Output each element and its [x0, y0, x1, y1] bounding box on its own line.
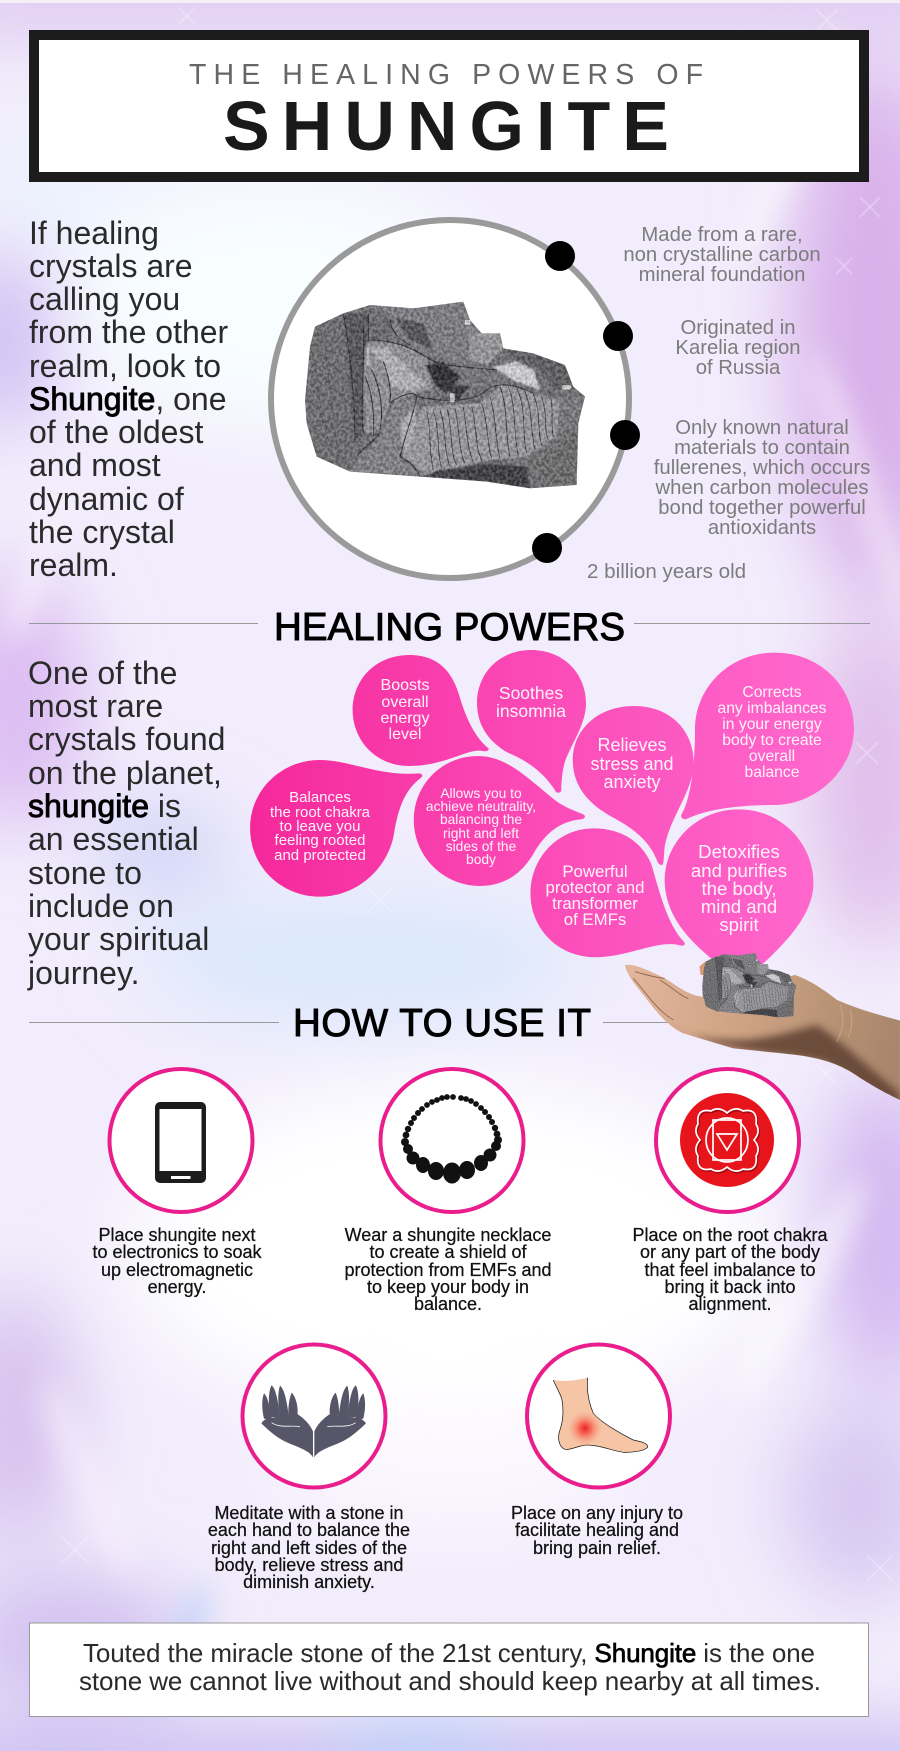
fact: fullerenes: antioxidants [708, 517, 816, 539]
use: phone [110, 1069, 252, 1212]
fact: origin: Karelia region [675, 337, 801, 359]
icon: phone [155, 1102, 206, 1183]
bubble: allows neutrality: body [466, 852, 496, 867]
bubble: boosts energy [381, 677, 429, 743]
intro text: realm, look to [29, 348, 221, 384]
icon: open hands [261, 1385, 366, 1457]
bubble: allows neutrality: balancing the [440, 812, 522, 827]
caption: injury [511, 1503, 683, 1558]
caption: meditate: diminish anxiety. [243, 1572, 375, 1592]
fact: fullerenes: bond together powerful [658, 497, 866, 519]
shungite rock [300, 297, 590, 493]
caption: root chakra [632, 1225, 829, 1314]
caption: meditate: Meditate with a stone in [214, 1503, 404, 1523]
intro text: and most [29, 447, 161, 483]
bubble: corrects imbalances: body to create [722, 732, 822, 749]
closing statement box: Touted the miracle stone of the 21st century, Shungite is the one [83, 1638, 815, 1668]
text: rare crystal: crystals found [28, 721, 225, 757]
use: injury [527, 1344, 670, 1488]
title main: SHUNGITE [223, 87, 669, 165]
bubble: EMF protector: protector and [546, 878, 644, 897]
caption: meditate [208, 1503, 410, 1592]
caption: meditate: each hand to balance the [208, 1520, 410, 1540]
bubble: detoxifies [691, 841, 787, 935]
caption: phone [92, 1225, 263, 1297]
caption: phone: to electronics to soak [92, 1242, 263, 1262]
fact: rare mineral: non crystalline carbon [623, 244, 821, 266]
fact dots [532, 241, 640, 563]
caption: root chakra: that feel imbalance to [644, 1260, 816, 1280]
bubble: balances root chakra: the root chakra [270, 804, 371, 821]
bubble: balances root chakra: Balances [289, 789, 351, 806]
closing statement box: stone we cannot live without and should keep nearby at all times. [79, 1666, 821, 1696]
caption: injury: bring pain relief. [533, 1538, 661, 1558]
speech bubbles [250, 650, 854, 967]
bubble: EMF protector: transformer [552, 894, 638, 913]
caption: necklace [344, 1225, 552, 1314]
fact: fullerenes: when carbon molecules [654, 477, 869, 499]
intro text: from the other [29, 314, 229, 350]
text: rare crystal [27, 655, 225, 991]
icon: necklace [401, 1094, 502, 1184]
bubble: balances root chakra: to leave you [280, 818, 360, 835]
use: necklace [380, 1069, 524, 1212]
hand holding shungite [620, 951, 900, 1107]
bubble: detoxifies: spirit [719, 914, 759, 935]
fact: fullerenes: Only known natural [675, 417, 849, 439]
fact: fullerenes [654, 417, 870, 539]
line beside how to use it heading [29, 1022, 670, 1024]
caption: necklace: protection from EMFs and [344, 1260, 552, 1280]
text: rare crystal: most rare [28, 688, 163, 724]
fact: fullerenes: fullerenes, which occurs [654, 457, 870, 479]
caption: injury: facilitate healing and [515, 1520, 679, 1540]
bubble: detoxifies: mind and [701, 896, 777, 917]
text: rare crystal: on the planet, [28, 755, 222, 791]
caption: meditate: body, relieve stress and [215, 1555, 403, 1575]
intro text: calling you [29, 281, 180, 317]
bubble: relieves stress: anxiety [603, 772, 661, 792]
caption: root chakra: alignment. [688, 1294, 772, 1314]
caption: necklace: balance. [414, 1294, 482, 1314]
intro text: of the oldest [29, 414, 203, 450]
intro text: If healing [29, 215, 159, 251]
text: rare crystal: include on [28, 888, 174, 924]
bubble: detoxifies: and purifies [691, 860, 787, 881]
title banner [34, 35, 864, 177]
bubble: boosts energy: energy [381, 710, 429, 727]
bubble: allows neutrality: sides of the [446, 839, 517, 854]
fact: fullerenes: materials to contain [674, 437, 850, 459]
bubble: relieves stress: stress and [590, 754, 674, 774]
caption: phone: energy. [148, 1277, 206, 1297]
bubble: balances root chakra [270, 789, 371, 864]
title kicker: THE HEALING POWERS OF [189, 59, 703, 91]
bubble: EMF protector: Powerful [562, 862, 628, 881]
bubble: corrects imbalances: any imbalances [717, 700, 827, 717]
text: rare crystal: an essential [28, 821, 199, 857]
closing statement box [30, 1623, 868, 1716]
bubble: allows neutrality: Allows you to [440, 786, 522, 801]
bubble: corrects imbalances: in your energy [722, 716, 822, 733]
bubble: boosts energy: level [389, 726, 421, 743]
intro text [29, 215, 229, 583]
bubble: EMF protector: of EMFs [564, 910, 626, 929]
bubble: boosts energy: overall [381, 694, 429, 711]
icon: foot with pain point [553, 1378, 648, 1452]
bubble: soothes insomnia: Soothes [499, 683, 563, 703]
bubble: relieves stress [590, 735, 674, 792]
fact: age: 2 billion years old [587, 560, 746, 583]
circle with shungite rock and fact dots [271, 220, 640, 578]
caption: phone: Place shungite next [98, 1225, 256, 1245]
caption: necklace: to create a shield of [369, 1242, 528, 1262]
intro text: Shungite, one [29, 381, 226, 417]
bubble: corrects imbalances: Corrects [742, 684, 802, 701]
fact: rare mineral: mineral foundation [639, 264, 805, 286]
bubble: corrects imbalances [717, 684, 827, 781]
caption: injury: Place on any injury to [511, 1503, 683, 1523]
text: rare crystal: stone to [28, 855, 142, 891]
heading: how to use it: HOW TO USE IT [293, 1002, 591, 1045]
fact: origin: Originated in [680, 317, 796, 339]
bubble: allows neutrality: achieve neutrality, [426, 799, 536, 814]
bubble: detoxifies: Detoxifies [698, 841, 780, 862]
use: meditate [242, 1344, 386, 1488]
intro text: the crystal [29, 514, 175, 550]
bubble: relieves stress: Relieves [597, 735, 667, 755]
bubble: soothes insomnia: insomnia [496, 701, 566, 721]
caption: phone: up electromagnetic [101, 1260, 253, 1280]
bubble: EMF protector [546, 862, 644, 929]
bubble: detoxifies: the body, [701, 878, 777, 899]
text: rare crystal: One of the [28, 655, 177, 691]
caption: root chakra: or any part of the body [640, 1242, 820, 1262]
intro text: realm. [29, 547, 118, 583]
fact: origin [675, 317, 801, 379]
caption: root chakra: bring it back into [664, 1277, 796, 1297]
bubble: allows neutrality: right and left [443, 826, 519, 841]
bubble: corrects imbalances: balance [745, 764, 800, 781]
caption: necklace: to keep your body in [367, 1277, 529, 1297]
intro text: dynamic of [29, 481, 184, 517]
small shungite rock [700, 951, 798, 1019]
caption: meditate: right and left sides of the [211, 1538, 407, 1558]
fact: rare mineral [623, 224, 821, 286]
caption: root chakra: Place on the root chakra [632, 1225, 829, 1245]
intro text: crystals are [29, 248, 193, 284]
bubble: balances root chakra: feeling rooted [275, 832, 365, 849]
use: root chakra [656, 1069, 799, 1212]
bubble: boosts energy: Boosts [381, 677, 429, 694]
fact: origin: of Russia [696, 357, 781, 379]
bubble: balances root chakra: and protected [274, 847, 366, 864]
heading: healing powers: HEALING POWERS [274, 606, 625, 649]
icon: root chakra [680, 1093, 774, 1187]
fact: rare mineral: Made from a rare, [641, 224, 803, 246]
text: rare crystal: your spiritual [28, 921, 209, 957]
text: rare crystal: shungite is [28, 788, 181, 824]
bubble: allows neutrality [426, 786, 536, 867]
caption: necklace: Wear a shungite necklace [345, 1225, 551, 1245]
bubble: soothes insomnia [496, 683, 566, 721]
text: rare crystal: journey. [27, 955, 139, 991]
bubble: corrects imbalances: overall [749, 748, 795, 765]
